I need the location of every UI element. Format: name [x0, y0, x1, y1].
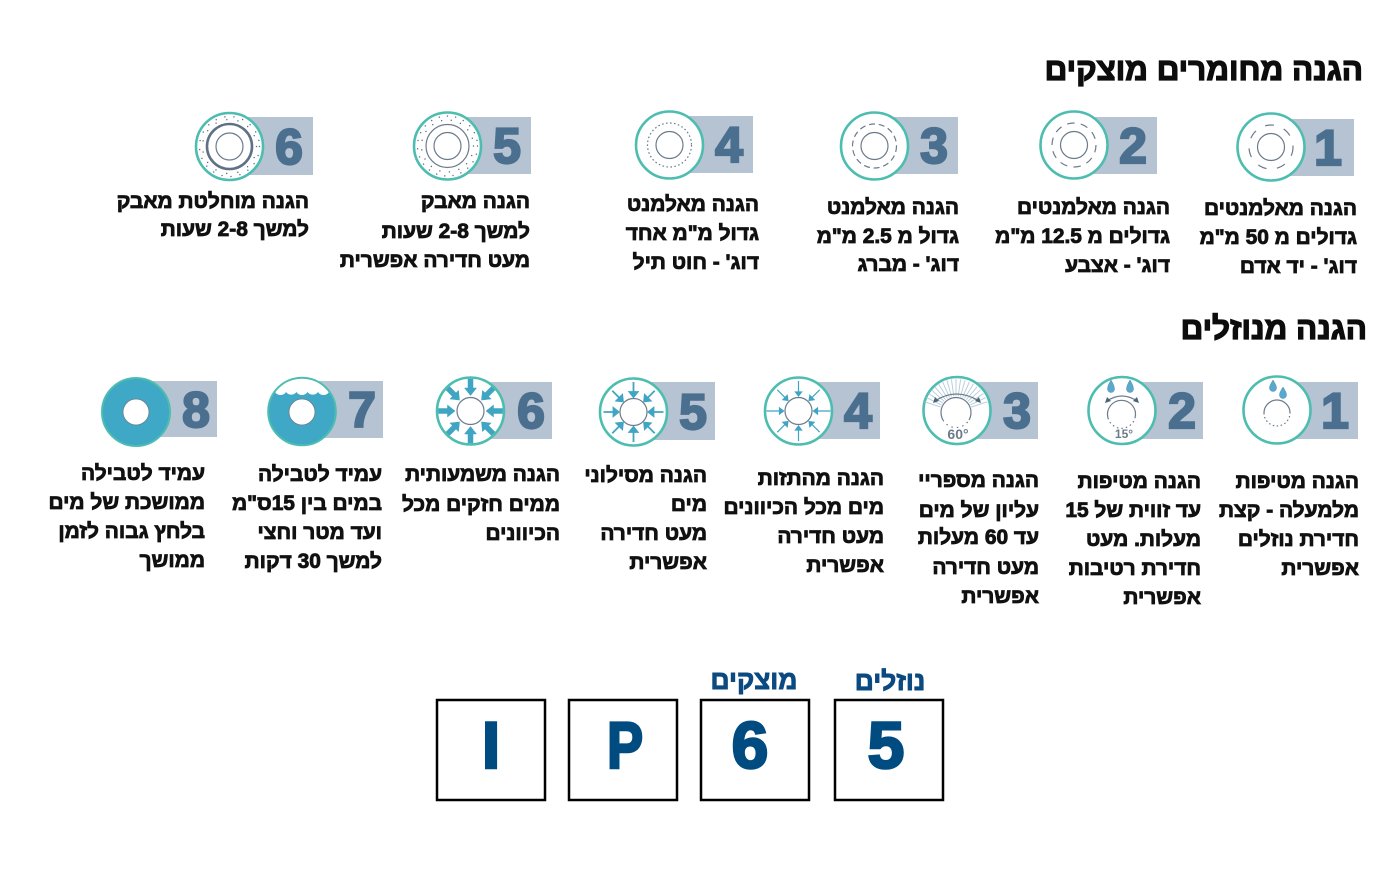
description 1: מלמעלה - קצת	[1219, 499, 1359, 522]
description 8: בלחץ גבוה לזמן	[58, 520, 205, 543]
description 5: הגנה מסילוני	[584, 464, 707, 487]
description 4: דוג' - חוט תיל	[633, 251, 759, 274]
number tab 3: 3	[1003, 383, 1031, 439]
description 6: הגנה משמעותית	[405, 463, 560, 486]
description 8: עמיד לטבילה	[81, 462, 205, 485]
description 3	[918, 469, 1039, 608]
icon: drops at 15 degrees	[1088, 377, 1156, 444]
liquids level 7	[232, 378, 383, 573]
liquids level 1	[1219, 376, 1359, 580]
description 2	[1065, 470, 1201, 609]
description 5: למשך 2-8 שעות	[382, 220, 530, 243]
description 1: הגנה מאלמנטים	[1204, 197, 1357, 220]
description 5: אפשרית	[629, 551, 707, 574]
description 3	[817, 196, 959, 276]
box: digit 6: 6	[732, 708, 768, 782]
icon: medium element ring	[1040, 112, 1108, 178]
description 6	[117, 190, 309, 241]
icon: water jets	[600, 378, 667, 446]
description 1: גדולים מ 50 מ"מ	[1200, 226, 1357, 249]
description 3: עליון של מים	[919, 499, 1039, 522]
section: protection from solids	[117, 52, 1363, 278]
heading: liquids: הגנה מנוזלים	[1181, 311, 1367, 346]
icon: dust tight ring	[196, 113, 263, 180]
number tab 6: 6	[275, 119, 303, 175]
description 5	[584, 464, 707, 574]
number tab 8: 8	[182, 382, 210, 438]
description 1	[1219, 470, 1359, 580]
number tab 7: 7	[348, 382, 376, 438]
number tab 6	[471, 382, 552, 439]
label: solids: מוצקים	[711, 665, 797, 695]
section: protection from liquids	[48, 311, 1367, 609]
icon: vertical drops	[1244, 376, 1310, 444]
icon: small element ring	[841, 112, 908, 180]
description 7: עמיד לטבילה	[258, 463, 382, 486]
description 5: הגנה מאבק	[421, 190, 530, 213]
box: digit 5: 5	[868, 708, 904, 782]
icon: temporary immersion	[268, 378, 336, 445]
liquids level 5	[584, 378, 715, 574]
liquids level 4	[724, 378, 884, 577]
description 2: הגנה מטיפות	[1078, 470, 1201, 493]
description 4	[724, 467, 884, 577]
description 3: הגנה מספריי	[918, 469, 1039, 492]
description 3: מעט חדירה	[932, 556, 1039, 579]
number tab 6	[230, 117, 313, 175]
description 1: אפשרית	[1281, 557, 1359, 580]
description 3: דוג' - מברג	[857, 253, 959, 276]
number tab 5	[633, 382, 715, 440]
number tab 3	[874, 117, 958, 174]
description 5: מעט חדירה אפשרית	[340, 249, 530, 272]
description 4: מעט חדירה	[777, 525, 884, 548]
description 1	[1200, 197, 1357, 278]
description 2: מעלות. מעט	[1086, 528, 1201, 551]
number tab 8	[136, 381, 217, 438]
description 8	[48, 462, 205, 572]
description 6: למשך 2-8 שעות	[161, 218, 309, 241]
code diagram: IP65	[437, 665, 943, 800]
description 2: גדולים מ 12.5 מ"מ	[995, 225, 1170, 248]
description 1: חדירת נוזלים	[1238, 528, 1359, 551]
liquids level 8	[48, 378, 217, 572]
description 4	[626, 193, 759, 274]
liquids level 6	[402, 378, 560, 545]
number tab 3	[957, 382, 1038, 439]
description 4: הגנה מהתזות	[758, 467, 884, 490]
icon: spray at 60 degrees	[924, 377, 990, 444]
solids level 4	[626, 112, 759, 274]
icon: splashes from all directions	[765, 378, 832, 444]
description 3: הגנה מאלמנט	[827, 196, 959, 219]
label: liquids: נוזלים	[855, 666, 925, 696]
icon: powerful water jets	[437, 378, 504, 444]
icon: large element ring	[1238, 114, 1304, 180]
description 7: ועד מטר וחצי	[257, 521, 382, 544]
description 4: מים מכל הכיוונים	[724, 496, 884, 519]
number tab 2	[1122, 382, 1203, 439]
description 1: דוג' - יד אדם	[1240, 255, 1357, 278]
description 2: עד זווית של 15	[1065, 499, 1201, 522]
description 5	[340, 190, 530, 272]
description 6: ממים חזקים מכל	[402, 493, 560, 516]
description 3: עד 60 מעלות	[918, 526, 1039, 549]
box: letter P: P	[607, 708, 643, 782]
icon: drops at 15 degrees: 15°	[1115, 427, 1133, 441]
solids level 5	[340, 112, 531, 272]
description 2: חדירת רטיבות	[1069, 557, 1201, 580]
liquids level 3	[918, 377, 1039, 608]
icon: spray at 60 degrees: 60°	[947, 426, 969, 442]
number tab 1	[1271, 119, 1354, 176]
number tab 1: 1	[1321, 383, 1349, 439]
description 7: במים בין 15ס"מ	[232, 492, 382, 515]
description 6	[402, 463, 560, 545]
description 6: הגנה מוחלטת מאבק	[117, 190, 309, 213]
box: digit 5	[835, 700, 943, 800]
box: digit 6	[701, 700, 809, 800]
icon: continuous immersion	[102, 378, 170, 446]
number tab 4	[799, 382, 880, 439]
solids level 6	[117, 113, 313, 241]
number tab 2: 2	[1168, 383, 1196, 439]
number tab 2	[1074, 117, 1157, 174]
number tab 7	[302, 381, 383, 438]
description 2	[995, 196, 1170, 277]
description 3: גדול מ 2.5 מ"מ	[817, 225, 959, 248]
icon: dust ring	[414, 112, 481, 180]
description 8: ממושכת של מים	[48, 491, 205, 514]
description 4: גדול מ"מ אחד	[626, 222, 759, 245]
description 2: אפשרית	[1123, 586, 1201, 609]
description 7: למשך 30 דקות	[245, 550, 382, 573]
number tab 6: 6	[517, 383, 545, 439]
description 1: הגנה מטיפות	[1236, 470, 1359, 493]
solids level 2	[995, 112, 1170, 277]
description 2: הגנה מאלמנטים	[1017, 196, 1170, 219]
box: letter I	[437, 700, 545, 800]
icon: fine element dotted ring	[636, 112, 703, 178]
box: letter I: I	[482, 708, 500, 782]
number tab 2: 2	[1119, 118, 1147, 174]
description 3: אפשרית	[961, 585, 1039, 608]
description 5: מעט חדירה	[600, 522, 707, 545]
description 4: אפשרית	[806, 554, 884, 577]
description 6: הכיוונים	[485, 522, 560, 545]
number tab 3: 3	[920, 118, 948, 174]
number tab 4	[670, 116, 753, 173]
number tab 5: 5	[679, 384, 707, 440]
box: letter P	[569, 700, 677, 800]
description 7	[232, 463, 382, 573]
solids level 3	[817, 112, 959, 276]
solids level 1	[1200, 114, 1357, 278]
number tab 5	[448, 117, 531, 174]
number tab 4: 4	[715, 117, 743, 173]
description 8: ממושך	[140, 549, 205, 572]
description 4: הגנה מאלמנט	[627, 193, 759, 216]
number tab 4: 4	[844, 383, 872, 439]
heading: solids: הגנה מחומרים מוצקים	[1045, 52, 1363, 87]
number tab 5: 5	[493, 118, 521, 174]
number tab 1: 1	[1314, 120, 1342, 176]
description 2: דוג' - אצבע	[1065, 254, 1170, 277]
liquids level 2	[1065, 377, 1203, 609]
description 5: מים	[671, 493, 707, 516]
number tab 1	[1277, 382, 1358, 439]
